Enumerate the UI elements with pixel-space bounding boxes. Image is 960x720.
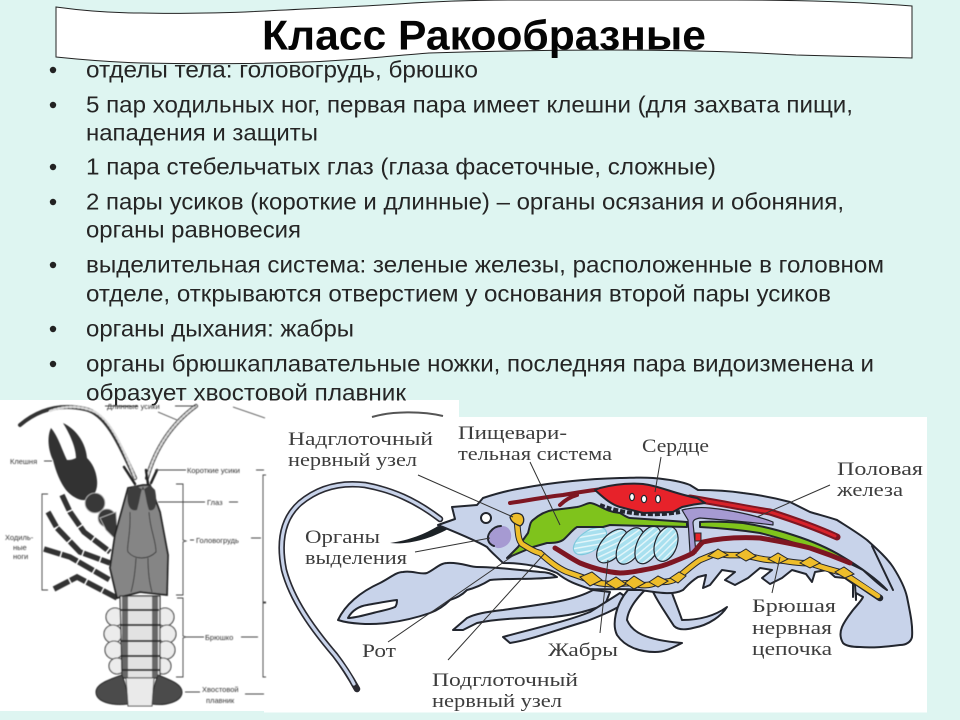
bullet: antennae <box>50 188 844 242</box>
claw opening <box>348 600 397 618</box>
abdomen segments <box>120 596 160 678</box>
claw joints <box>85 493 118 542</box>
anatomy labels: нервный узел <box>288 450 418 471</box>
small labels: плавник <box>206 696 235 705</box>
bullet: walking legs: нападения и защиты <box>86 120 318 146</box>
anatomy labels: тельная система <box>458 444 613 465</box>
anatomy labels: Подглоточный <box>432 670 578 691</box>
main body <box>438 478 912 647</box>
heart <box>595 484 705 513</box>
pericardial band <box>600 505 680 514</box>
small labels <box>5 402 240 705</box>
bullet: walking legs: 5 пар ходильных ног, первая пара имеет клешни (для захвата пищи, <box>86 92 853 118</box>
third leg <box>615 590 682 652</box>
illustration: crayfish anatomy section <box>282 423 923 712</box>
small labels: Головогрудь <box>196 536 239 545</box>
anatomy labels: Половая <box>837 459 923 480</box>
cephalothorax <box>110 485 168 598</box>
small labels: ноги <box>13 552 28 561</box>
bullet: walking legs <box>50 92 853 146</box>
small labels: Короткие усики <box>187 466 240 475</box>
front arteries <box>510 487 620 505</box>
bullet: respiratory organs: органы дыхания: жабры <box>86 316 354 342</box>
anatomy labels: выделения <box>305 548 407 569</box>
fourth leg <box>650 580 727 629</box>
panel: white image background <box>0 400 927 712</box>
bullet: abdominal organs <box>50 350 874 406</box>
anatomy labels: Рот <box>362 641 397 662</box>
small labels: Ходиль- <box>5 533 34 542</box>
short antenna <box>390 526 448 543</box>
leader lines <box>388 457 830 660</box>
walking legs <box>44 495 117 598</box>
supraesophageal ganglion <box>510 513 524 526</box>
anatomy labels: Брюшая <box>752 596 836 617</box>
carapace markings <box>127 485 156 510</box>
excretory organ <box>488 526 511 548</box>
second leg <box>503 593 630 643</box>
title text: Класс Ракообразные <box>262 12 706 58</box>
claw <box>338 563 557 624</box>
bullet: abdominal organs: органы брюшкаплавательные ножки, последняя пара видоизменена и <box>86 350 874 376</box>
anatomy labels: Пищевари- <box>458 423 567 444</box>
dorsal artery <box>690 498 837 537</box>
title banner <box>56 0 912 64</box>
gonad <box>682 508 773 553</box>
illustration: crayfish from above <box>5 402 266 706</box>
bullet: antennae: 2 пары усиков (короткие и длинные) – органы осязания и обоняния, <box>86 188 844 214</box>
hind gut <box>700 522 887 590</box>
small labels: ные <box>13 543 27 552</box>
anatomical brackets <box>42 475 266 677</box>
heart openings <box>630 493 660 503</box>
digestive system <box>507 503 687 558</box>
eye opening <box>481 513 491 523</box>
abdomen side plates <box>104 608 176 674</box>
long antenna <box>282 484 440 689</box>
bullet: excretory system: выделительная система: зеленые железы, расположенные в головном <box>86 252 884 278</box>
anatomy labels: нервная <box>752 618 832 639</box>
bullet: antennae: органы равновесия <box>86 216 301 242</box>
front leg <box>453 590 610 630</box>
anatomy labels <box>288 423 923 712</box>
anatomy labels: Жабры <box>548 640 618 661</box>
bullet list <box>50 56 884 406</box>
telson outline <box>853 546 893 597</box>
bullet: excretory system: отделе, открываются отверстием у основания второй пары усиков <box>86 280 831 306</box>
bullet: abdominal organs: образует хвостовой плавник <box>86 380 407 406</box>
ventral vessel <box>695 533 701 541</box>
small labels: Клешня <box>10 457 37 466</box>
small labels: Глаз <box>207 498 223 507</box>
anatomy labels: нервный узел <box>432 691 563 712</box>
gills <box>569 522 682 569</box>
anatomy labels: железа <box>836 480 904 501</box>
anatomy labels: цепочка <box>752 639 833 660</box>
bullet: body sections: отделы тела: головогрудь, брюшко <box>86 56 478 82</box>
long antennae <box>20 406 196 484</box>
anatomy labels: Органы <box>305 527 380 548</box>
anatomy labels: Надглоточный <box>288 429 433 450</box>
tail fan <box>96 675 182 706</box>
fragment of antenna at top <box>372 412 443 417</box>
small labels: Хвостовой <box>202 685 239 694</box>
small labels: Брюшко <box>205 633 233 642</box>
small labels: Длинные усики <box>107 402 160 411</box>
bullet: eyes: 1 пара стебельчатых глаз (глаза фасеточные, сложные) <box>86 154 716 180</box>
ventral nerve cord <box>510 513 880 598</box>
ventral artery <box>555 538 850 573</box>
anatomy labels: Сердце <box>642 436 709 457</box>
banner shape <box>56 0 912 64</box>
nerve ganglia <box>580 549 854 589</box>
legs <box>453 580 727 652</box>
claw <box>49 423 97 500</box>
bullet: excretory system <box>50 252 884 306</box>
pointer lines <box>44 406 265 694</box>
